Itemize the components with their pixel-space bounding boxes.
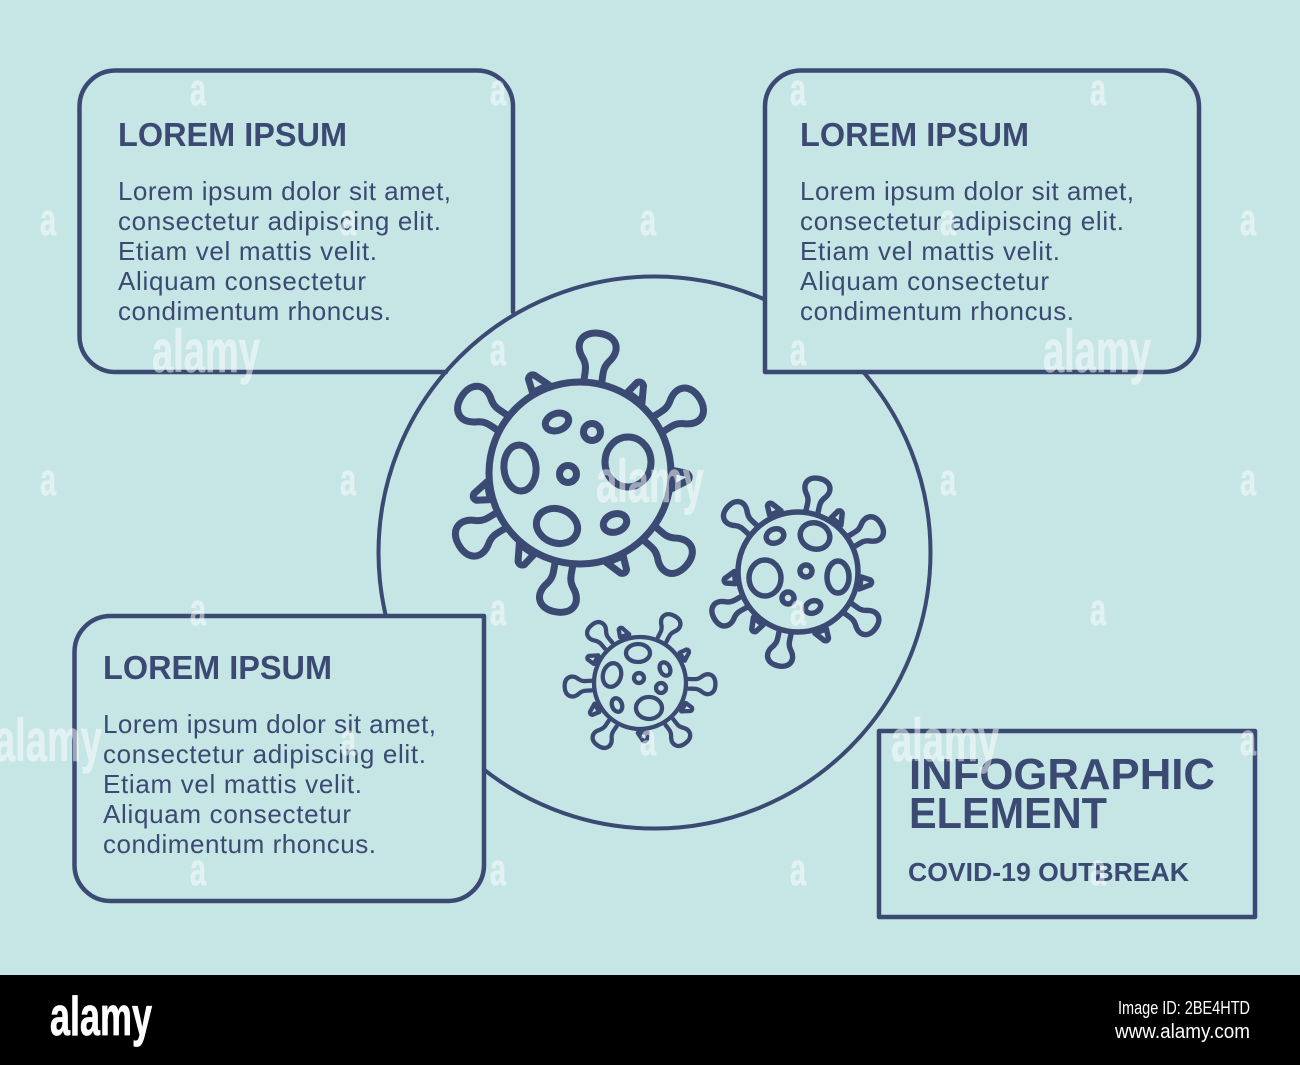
watermarks: a <box>490 844 507 895</box>
image id: Image ID: 2BE4HTD <box>1118 998 1250 1018</box>
watermarks: a <box>190 584 207 635</box>
footer logo: alamy <box>50 985 152 1047</box>
watermarks: alamy <box>1043 318 1151 385</box>
panel outline <box>80 70 513 372</box>
body text <box>118 176 451 326</box>
watermarks: a <box>790 844 807 895</box>
watermarks: a <box>40 454 57 505</box>
watermarks: a <box>640 714 657 765</box>
panel: top left <box>80 70 513 372</box>
watermarks: a <box>1240 194 1257 245</box>
body text: Aliquam consectetur <box>103 799 351 829</box>
body text <box>103 709 436 859</box>
watermarks: a <box>490 64 507 115</box>
heading: LOREM IPSUM <box>103 649 332 686</box>
heading: LOREM IPSUM <box>118 116 347 153</box>
watermarks: a <box>340 454 357 505</box>
website: www.alamy.com <box>1114 1021 1250 1043</box>
watermarks: a <box>790 324 807 375</box>
watermarks: alamy <box>152 318 260 385</box>
central circle <box>378 276 930 828</box>
watermarks: alamy <box>596 448 704 515</box>
watermarks: a <box>490 584 507 635</box>
body text: Lorem ipsum dolor sit amet, <box>103 709 436 739</box>
body text: Etiam vel mattis velit. <box>103 769 362 799</box>
icon: medium virus <box>708 476 887 668</box>
body text: Lorem ipsum dolor sit amet, <box>118 176 451 206</box>
watermarks <box>0 64 1257 895</box>
watermarks: a <box>940 194 957 245</box>
icon: large virus <box>450 331 709 615</box>
watermarks: a <box>790 64 807 115</box>
body text: Lorem ipsum dolor sit amet, <box>800 176 1134 206</box>
watermarks: a <box>1090 844 1107 895</box>
subtitle: COVID-19 OUTBREAK <box>908 859 1190 887</box>
title second line: ELEMENT <box>909 790 1107 838</box>
watermarks: a <box>190 64 207 115</box>
body text: Aliquam consectetur <box>800 266 1049 296</box>
body text: condimentum rhoncus. <box>103 829 376 859</box>
body text: condimentum rhoncus. <box>800 296 1074 326</box>
watermarks: a <box>940 454 957 505</box>
watermarks: a <box>790 584 807 635</box>
body text: consectetur adipiscing elit. <box>103 739 426 769</box>
watermarks: a <box>1240 454 1257 505</box>
title box outline <box>879 731 1255 917</box>
body text <box>800 176 1134 326</box>
panel outline <box>765 70 1199 372</box>
body text: Etiam vel mattis velit. <box>118 236 377 266</box>
panel: top right <box>765 70 1199 372</box>
watermarks: a <box>190 844 207 895</box>
body text: Aliquam consectetur <box>118 266 366 296</box>
watermarks: alamy <box>891 707 999 774</box>
watermarks: a <box>640 194 657 245</box>
panel: bottom left <box>74 616 484 901</box>
watermarks: a <box>340 194 357 245</box>
watermarks: a <box>40 194 57 245</box>
body text: consectetur adipiscing elit. <box>800 206 1124 236</box>
icon: small virus <box>564 611 716 751</box>
body text: Etiam vel mattis velit. <box>800 236 1060 266</box>
watermarks: a <box>1240 714 1257 765</box>
watermarks: a <box>340 714 357 765</box>
body text: consectetur adipiscing elit. <box>118 206 441 236</box>
watermarks: a <box>1090 584 1107 635</box>
title box <box>879 731 1255 917</box>
footer bar <box>0 975 1300 1065</box>
watermarks: a <box>490 324 507 375</box>
body text: condimentum rhoncus. <box>118 296 391 326</box>
heading: LOREM IPSUM <box>800 116 1029 153</box>
panel outline <box>74 616 484 901</box>
title: INFOGRAPHIC <box>909 751 1215 799</box>
watermarks: a <box>1090 64 1107 115</box>
